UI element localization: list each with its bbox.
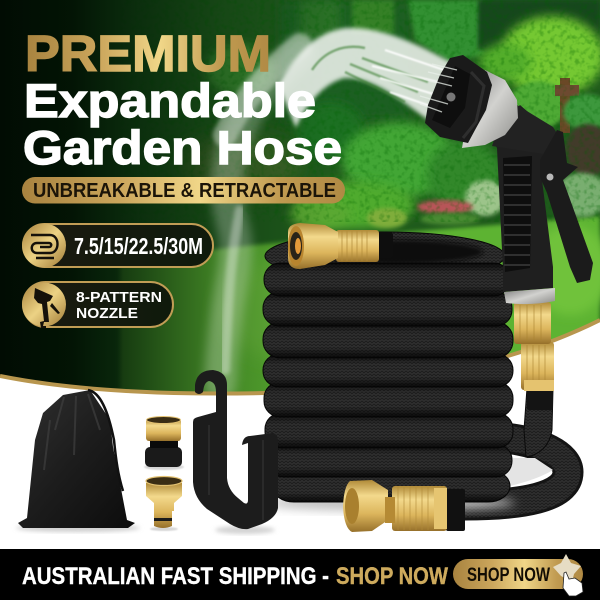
coil shadow (265, 495, 515, 511)
title: PREMIUM: PREMIUM (25, 25, 271, 82)
nozzle head ring (425, 55, 492, 143)
vertical hose section (524, 388, 553, 457)
button: shop now (453, 559, 583, 589)
drawstring bag (16, 390, 140, 532)
nozzle spray lines (420, 64, 457, 112)
top brass connector (288, 223, 393, 269)
title: Garden Hose: Garden Hose (23, 121, 342, 174)
button: shop now: SHOP NOW (467, 565, 550, 586)
water spray arcs (278, 28, 458, 128)
icon: coiled hose (31, 235, 58, 258)
foliage texture (192, 0, 600, 222)
hose return loop (465, 438, 568, 505)
coil back ring (265, 232, 505, 280)
icon: nozzle silhouette (34, 288, 60, 328)
title: Expandable: Expandable (24, 74, 316, 127)
brass adapter with black collar (144, 416, 184, 470)
hose coil (263, 232, 568, 511)
badge: 8-pattern nozzle: NOZZLE (76, 305, 138, 322)
nozzle silver collar (462, 70, 518, 148)
banner text: shop now: SHOP NOW (336, 563, 448, 590)
spray nozzle (420, 55, 593, 391)
dark left fade (0, 0, 330, 400)
badge: 8-pattern nozzle: 8-PATTERN (76, 289, 162, 306)
bottom banner (0, 549, 600, 600)
black wall hook (193, 370, 278, 534)
badge: unbreakable and retractable: UNBREAKABLE & RETRACTABLE (33, 180, 336, 202)
gold curved border (0, 320, 600, 394)
icon: click hand (553, 554, 583, 596)
nozzle silver ring (504, 288, 555, 304)
lawn (120, 216, 600, 400)
nozzle trigger (540, 130, 593, 283)
nozzle brass base (514, 302, 554, 391)
garden background photo (0, 0, 600, 400)
badge: 8-pattern nozzle (22, 282, 173, 328)
water falling from spray (220, 45, 300, 385)
nozzle barrel (492, 105, 558, 155)
bag cord (88, 390, 123, 491)
title (23, 25, 342, 174)
nozzle grip (490, 105, 553, 292)
bottom brass connector (343, 480, 465, 532)
trees and shrubs (180, 0, 600, 229)
banner text: australian fast shipping: AUSTRALIAN FAST SHIPPING - (22, 563, 329, 590)
coil bands, bottom to top (263, 263, 513, 502)
badge: hose lengths (22, 224, 213, 268)
brass tap adapter (146, 476, 182, 531)
badge: hose lengths: 7.5/15/22.5/30M (74, 233, 203, 259)
